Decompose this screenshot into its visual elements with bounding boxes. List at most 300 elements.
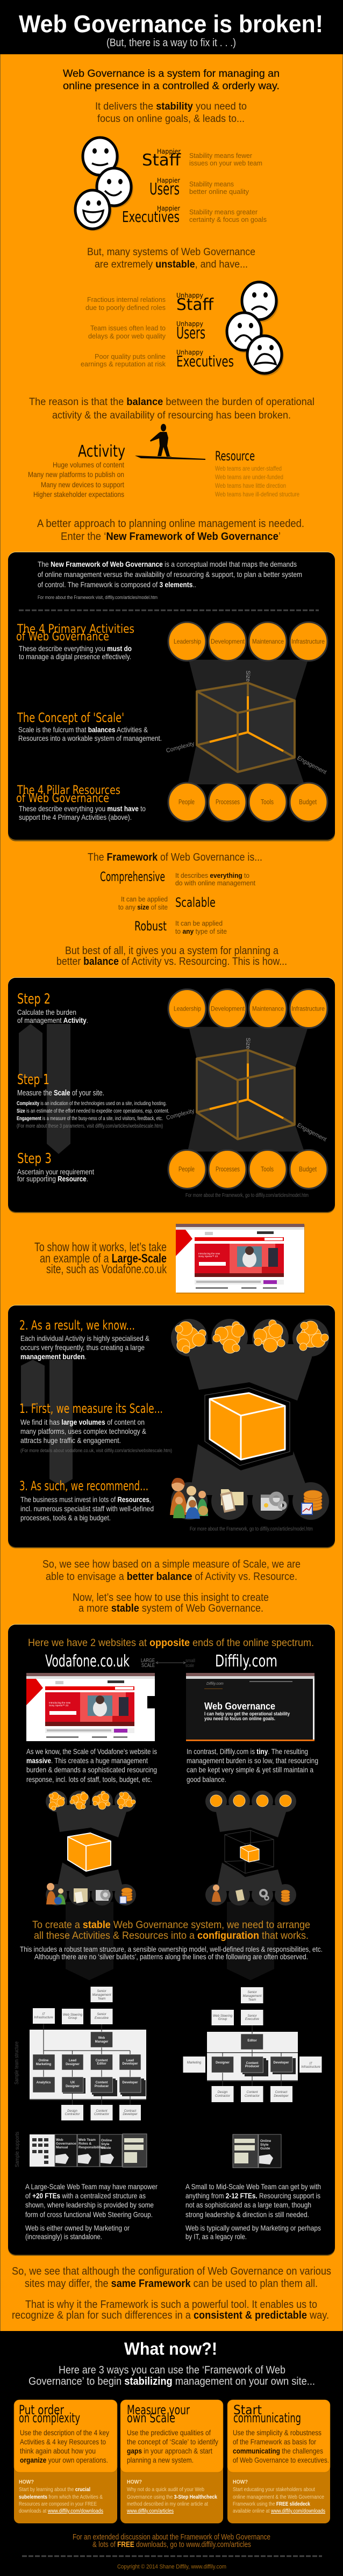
large-scale example text: To show how it works, let’s take (34, 1240, 167, 1254)
step 3: Ascertain your requirement (17, 1167, 94, 1176)
org chart: large team: Developer (122, 2062, 138, 2066)
small team description: A Small to Mid-Scale Web Team can get by with (185, 2182, 321, 2191)
card: measure your own scale: Use the predictive qualities of (127, 2428, 211, 2437)
card: start communicating (227, 2400, 330, 2523)
stability text: It delivers the stability you need to (95, 101, 247, 112)
better approach text: A better approach to planning online management is needed. (37, 518, 304, 530)
card: put order on complexity: HOW? (19, 2479, 34, 2485)
vodafone description: burden & demands a sophisticated resourcing (26, 1765, 157, 1774)
card: measure your own scale: Governance using the 3-Step Healthcheck (127, 2494, 217, 2500)
panel: framework (8, 552, 335, 841)
icon: activity blobs (175, 1320, 328, 1353)
scalable: It can be applied (121, 895, 168, 903)
step 2: Calculate the burden (17, 1008, 76, 1016)
org chart: small team: Contract (275, 2091, 288, 2094)
org chart: large team: Content (96, 2110, 108, 2113)
same framework conclusion: That is why it the Framework is such a powerful tool. It enables us to (25, 2299, 317, 2311)
org chart: large team: Designer (66, 2085, 80, 2088)
step 2: of management Activity. (17, 1016, 88, 1024)
icon: staff figures (170, 1478, 208, 1519)
documents: large team supports: Online (101, 2139, 112, 2142)
what now intro: Here are 3 ways you can use the ‘Framework of Web (59, 2364, 285, 2376)
org chart: large team: Web (98, 2037, 105, 2040)
card: measure your own scale: the concept of ‘Scale’ to identify (127, 2437, 218, 2446)
activity circles: Leadership (174, 638, 201, 645)
unhappy list: reasons: delays & poor web quality (88, 332, 166, 340)
arrow: step flow up (19, 1024, 42, 1078)
scalable: Scalable (175, 895, 216, 910)
resource list: Web teams have little direction (215, 482, 286, 489)
unhappy list: reasons: Fractious internal relations (87, 295, 166, 304)
chart: framework model repeated: People (178, 1165, 195, 1173)
org chart: large team: Lead (126, 2059, 134, 2062)
title (19, 10, 323, 49)
step 1: Step 1 (17, 1072, 49, 1088)
step: as a result: 2. As a result, we know... (19, 1318, 135, 1333)
unhappy list: labels: Unhappy (176, 349, 203, 356)
arrow: flow down (49, 1360, 73, 1486)
label: sample team structure: Sample team structure (14, 2041, 20, 2084)
org chart: large team: IT (42, 2013, 46, 2016)
step 3: Step 3 (17, 1151, 52, 1167)
small team description: strong leadership & direction is still needed. (185, 2210, 309, 2219)
activity list: Many new devices to support (41, 480, 124, 489)
happier executives: Executives (122, 208, 180, 226)
activity circles (168, 622, 327, 661)
documents: small team supports: Guide (260, 2147, 270, 2151)
card: start communicating: Use the simplicity & robustness (233, 2428, 321, 2437)
step 1: (For more about these 3 parameters, visit diffily.com/articles/websitescale.htm) (17, 1123, 163, 1129)
card: start communicating: Framework using the FREE slidedeck (233, 2501, 310, 2507)
unstable text (87, 247, 255, 270)
card: put order on complexity: Use the description of the 4 key (20, 2428, 109, 2437)
icon: processes folder and clipboard (220, 1489, 244, 1513)
resource circles: Budget (299, 798, 317, 806)
heading: 4 pillar resources: support the 4 Primary Activities (above). (19, 813, 132, 821)
screenshot: diffily: I can help you get the operational stability (204, 1711, 290, 1716)
org chart: small team: Contractor (215, 2095, 231, 2098)
framework link note: For more about the Framework, go to diffily.com/articles/model.htm (185, 1193, 309, 1199)
unhappy list: labels: Staff (176, 295, 214, 314)
org chart: small team: Designer (216, 2061, 230, 2065)
org chart: large team: Contractor (65, 2113, 81, 2116)
step: first measure: (For more details about vodafone.co.uk, visit diffily.com/articles/websitescale.htm) (20, 1448, 172, 1454)
card: put order on complexity: Put order (19, 2402, 64, 2418)
arrow: flow up (21, 1360, 45, 1406)
chart: small-scale mini model (205, 1791, 296, 1906)
org chart: small team: IT (309, 2062, 313, 2066)
intro definition text: online presence in a controlled & orderly way. (63, 81, 280, 92)
activity list: Huge volumes of content (53, 460, 124, 469)
activity list: Activity (78, 442, 125, 461)
icon: happy faces (75, 138, 133, 231)
step: recommend: incl. numerous specialist staff with well-defined (20, 1504, 154, 1513)
site names and scale arrow: SCALE (141, 1663, 155, 1669)
large team description: Web is either owned by Marketing or (25, 2224, 130, 2232)
site names and scale arrow: small (185, 1658, 195, 1663)
org chart: small team: Design (218, 2091, 228, 2094)
diffily description: In contrast, Diffily.com is tiny. The resulting (187, 1747, 308, 1756)
org chart: large team: Senior (97, 1990, 107, 1993)
framework qualities heading: The Framework of Web Governance is... (88, 852, 262, 863)
step 1: Engagement is a measure of the busy-ness of a site, incl visitors, feedback, etc. (17, 1115, 163, 1122)
org chart: large team: Manager (95, 2040, 109, 2044)
step 3: for supporting Resource. (17, 1174, 88, 1183)
robust: Robust (134, 919, 167, 934)
org chart: small team: Management (242, 1995, 262, 1998)
large team description: shown, where leadership is provided by some (25, 2200, 154, 2209)
large-scale example text: an example of a Large-Scale (40, 1251, 167, 1265)
icon: budget coins and chart (302, 1490, 322, 1514)
card: measure your own scale: gaps in your approach & start (127, 2447, 212, 2455)
unhappy list: reasons: due to poorly defined roles (85, 304, 166, 312)
comprehensive: do with online management (175, 879, 255, 887)
step: first measure: We find it has large volumes of content on (20, 1418, 145, 1426)
org chart: large team: Contract (124, 2110, 137, 2113)
org chart: large team: Editor (97, 2062, 106, 2066)
step: recommend: The business must invest in lots of Resources, (20, 1495, 151, 1504)
card: measure your own scale: HOW? (127, 2479, 142, 2485)
step: recommend: 3. As such, we recommend... (19, 1478, 148, 1493)
card: start communicating: communicating the challenges (233, 2447, 323, 2455)
same framework conclusion: sites may differ, the same Framework can be used to plan them all. (25, 2278, 318, 2290)
heading: 4 primary activities: These describe everything you must do (19, 644, 132, 653)
stability text: focus on online goals, & leads to... (97, 113, 245, 125)
configuration heading: To create a stable Web Governance system, we need to arrange (32, 1920, 310, 1931)
framework intro text (38, 560, 302, 600)
diffily description: can be kept very simple & yet still maintain a (187, 1765, 313, 1774)
better approach text (37, 518, 304, 543)
configuration explanation (20, 1945, 323, 1961)
small team description: not as sophisticated as a large team, though (185, 2200, 311, 2209)
card: start communicating: online management & the Web Governance (233, 2494, 324, 2500)
resource list: Resource (215, 449, 255, 464)
happier users: Happier (157, 177, 180, 184)
comprehensive: It describes everything to (175, 871, 249, 879)
heading: concept of scale: The Concept of 'Scale' (17, 710, 124, 725)
intro definition text (63, 68, 280, 92)
happier executives (122, 205, 267, 226)
card: put order on complexity: subelements from which the Activities & (19, 2494, 103, 2500)
card: start communicating: HOW? (233, 2479, 248, 2485)
documents: large team supports: Responsibilities (78, 2146, 105, 2149)
happier staff (142, 148, 262, 170)
comprehensive (100, 869, 255, 887)
org chart: large team: Contractor (94, 2113, 110, 2116)
large-scale example text: site, such as Vodafone.co.uk (46, 1262, 167, 1276)
best of all text: better balance of Activity vs. Resourcing. This is how... (56, 956, 287, 968)
card: put order on complexity: downloads at www.diffily.com/downloads (19, 2508, 103, 2514)
arrow: step flow down (47, 1024, 70, 1154)
card: put order on complexity: organize your own operations. (20, 2456, 108, 2464)
vodafone description: As we know, the Scale of Vodafone’s website is (26, 1747, 157, 1756)
activity list: Many new platforms to publish on (28, 470, 124, 479)
documents: large team supports: Governance (56, 2142, 76, 2146)
card: start communicating: of the Framework as basis for (233, 2437, 316, 2446)
happier staff: Happier (157, 148, 181, 155)
org chart: small team: Marketing (187, 2061, 202, 2065)
org chart: large team: Developer (123, 2113, 138, 2116)
org chart: small team: Content (246, 2091, 258, 2094)
happier users: Stability means (189, 180, 234, 188)
card: put order on complexity: Start by learning about the crucial (19, 2486, 90, 2493)
better balance text: a more stable system of Web Governance. (78, 1603, 263, 1614)
unhappy list: labels: Users (176, 324, 205, 343)
diffily description: good balance. (187, 1775, 226, 1784)
org chart: small team: Developer (273, 2061, 289, 2065)
robust: to any type of site (175, 927, 227, 935)
resource circles (168, 783, 327, 821)
org chart: small team: Infrastructure (301, 2066, 320, 2069)
icon: tools gears (261, 1493, 285, 1511)
card: measure your own scale: method described in my online article at (127, 2501, 208, 2507)
documents: small team supports: Online (260, 2139, 271, 2143)
label: sample supports: Sample supports (15, 2132, 20, 2167)
card: start communicating: Start educating your stakeholders about (233, 2486, 315, 2493)
org chart: large team (30, 1987, 146, 2120)
org chart: small team: Content (246, 2062, 258, 2065)
what now heading: What now?! (124, 2339, 217, 2358)
configuration explanation: Although there are no ‘silver bullets’, patterns along the lines of the following are often observed. (34, 1953, 308, 1961)
chart: framework model repeated: Budget (299, 1165, 317, 1173)
org chart: large team: Team (98, 1997, 105, 2001)
robust: It can be applied (175, 919, 223, 927)
same framework conclusion (12, 2265, 331, 2321)
icon: large solid cube (198, 1382, 297, 1470)
extended discussion note: & lots of FREE downloads, go to www.diffily.com/articles (92, 2541, 251, 2549)
arrow: shadow down left (66, 1902, 113, 1980)
documents: large team supports: Roles & (78, 2142, 92, 2146)
screenshot: vodafone: Introducing the new (49, 1701, 71, 1704)
card: measure your own scale: Why not do a quick audit of your Web (127, 2486, 204, 2493)
activity circles: Maintenance (252, 638, 284, 645)
org chart: large team: Lead (69, 2059, 76, 2062)
org chart: large team: Producer (95, 2085, 109, 2088)
activity list: Higher stakeholder expectations (33, 490, 124, 499)
site names and scale arrow: LARGE (141, 1658, 155, 1664)
step 2 (17, 991, 88, 1024)
org chart: large team: Management (92, 1994, 111, 1997)
extended discussion note (73, 2533, 270, 2549)
screenshot: diffily (186, 1673, 315, 1741)
configuration heading (32, 1920, 310, 1942)
arrow: shadow down right (227, 1902, 274, 1980)
step: as a result: Each individual Activity is highly specialised & (20, 1334, 150, 1343)
balance text: The reason is that the balance between the burden of operational (29, 396, 315, 408)
card: put order on complexity: on complexity (19, 2411, 80, 2426)
heading: concept of scale: Resources into a workable system of management. (18, 734, 162, 742)
card: measure your own scale: own Scale (127, 2411, 175, 2426)
card: measure your own scale: Measure your (127, 2402, 190, 2418)
site names and scale arrow: Diffily.com (215, 1652, 277, 1671)
chart: framework model repeated: Engagement (296, 1122, 327, 1143)
better balance text (42, 1558, 301, 1614)
robust (134, 919, 227, 935)
heading: 4 primary activities: The 4 Primary Activities (17, 623, 134, 636)
vodafone description (26, 1747, 157, 1784)
screenshot: vodafone: Sony Xperia™ Z2 (49, 1704, 69, 1707)
org chart: small team: Editor (247, 2039, 257, 2043)
card: put order on complexity (14, 2400, 117, 2523)
resource list: Web teams are under-staffed (215, 465, 282, 472)
documents: large team supports: Manual (56, 2146, 68, 2149)
documents: large team supports (30, 2134, 147, 2167)
happier users: Users (149, 180, 180, 199)
heading: 4 pillar resources: These describe everything you must have to (19, 804, 146, 813)
heading: 4 primary activities: to manage a digital presence effectively. (19, 652, 131, 661)
org chart: small team: Web Steering (213, 2015, 233, 2018)
card: start communicating: available online at www.diffily.com/downloads (233, 2508, 325, 2514)
unstable text: But, many systems of Web Governance (87, 247, 255, 258)
happier staff: Staff (142, 151, 181, 170)
screenshot: vodafone (26, 1673, 155, 1741)
balance text: activity & the availability of resourcing has been broken. (52, 409, 291, 421)
org chart: large team: Content (96, 2059, 108, 2062)
screenshot: vodafone (176, 1224, 305, 1294)
heading: concept of scale: Scale is the fulcrum that balances Activities & (18, 725, 148, 734)
card: measure your own scale: www.diffily.com/articles (126, 2508, 174, 2514)
better balance text: Now, let’s see how to use this insight to create (73, 1592, 269, 1604)
happier executives: certainty & focus on goals (189, 215, 267, 223)
scale cube: Complexity (166, 740, 195, 754)
resource circles: People (178, 798, 195, 806)
chart: framework model (166, 622, 327, 821)
step 2: Step 2 (17, 991, 51, 1007)
org chart: large team: Marketing (36, 2063, 52, 2066)
large team description: form of cross functional Web Steering Group. (25, 2210, 153, 2219)
chart: framework model repeated (166, 990, 327, 1188)
unhappy list: labels: Unhappy (176, 292, 203, 299)
large team description: A Large-Scale Web Team may have manpower (25, 2182, 158, 2191)
step: as a result: occurs very frequently, thus creating a large (20, 1343, 145, 1352)
happier executives: Happier (157, 205, 180, 212)
chart: large-scale model (170, 1319, 329, 1520)
chart: framework model repeated: Leadership (174, 1005, 201, 1012)
what now intro (28, 2364, 315, 2387)
step: as a result (19, 1318, 150, 1361)
small team description: Web is typically owned by Marketing or perhaps (185, 2224, 321, 2232)
org chart: small team: Team (248, 1998, 256, 2002)
step 3 (17, 1151, 94, 1183)
step 1: Complexity is an indication of the technologies used on a site, including hosting. (17, 1100, 167, 1107)
site names and scale arrow: Vodafone.co.uk (45, 1652, 130, 1671)
large team description: (increasingly) is standalone. (25, 2232, 102, 2241)
balance text (29, 396, 315, 421)
org chart: large team: Analytics (37, 2081, 51, 2084)
org chart: large team: Senior (97, 2013, 107, 2016)
scalable: to any size of site (118, 903, 168, 911)
unhappy list: labels: Unhappy (176, 320, 203, 328)
panel heading: Here we have 2 websites at opposite ends of the online spectrum. (28, 1637, 314, 1649)
documents: large team supports: Web (56, 2138, 63, 2142)
better balance text: So, we see how based on a simple measure of Scale, we are (42, 1558, 301, 1570)
heading: 4 pillar resources: of Web Governance (16, 792, 109, 805)
diffily description (187, 1747, 318, 1784)
screenshot: diffily: Web Governance (204, 1701, 275, 1712)
intro definition text: Web Governance is a system for managing an (63, 68, 280, 80)
resource list: Web teams are under-funded (215, 473, 283, 481)
org chart: large team: Web Steering (63, 2014, 83, 2017)
org chart: large team: Online (39, 2059, 49, 2062)
card: put order on complexity: think again about how you (20, 2447, 96, 2455)
org chart: large team: Design (67, 2110, 77, 2113)
stability text (95, 101, 247, 125)
better balance text: able to envisage a better balance of Activity vs. Resource. (46, 1571, 297, 1583)
title: Web Governance is broken! (19, 10, 323, 38)
org chart: large team: Content (96, 2081, 108, 2084)
happier staff: Stability means fewer (189, 151, 253, 160)
org chart: small team: Senior (247, 1991, 258, 1994)
chart: framework model repeated: Infrastructure (291, 1005, 325, 1012)
site names and scale arrow (45, 1652, 277, 1671)
configuration heading: all these Activities & Resources into a configuration that works. (34, 1930, 309, 1942)
small team description (185, 2182, 321, 2241)
panel: two websites compared (8, 1624, 335, 2256)
org chart: large team: Group (68, 2017, 77, 2020)
large-scale example text (34, 1240, 167, 1276)
documents: large team supports: Style (101, 2142, 110, 2146)
org chart: small team: Group (218, 2018, 227, 2021)
unhappy list: labels: Executives (176, 352, 234, 370)
best of all text (56, 945, 287, 968)
org chart: small team: Executive (245, 2018, 260, 2021)
panel: steps (8, 977, 335, 1213)
unhappy list: reasons: Poor quality puts online (95, 352, 166, 360)
chart: framework model repeated: Maintenance (252, 1005, 284, 1012)
framework intro text: of online management versus the availability of resourcing & support, to plan a better system (38, 570, 302, 579)
scale cube (166, 670, 327, 776)
scale cube: Size (245, 670, 251, 682)
framework intro text: The New Framework of Web Governance is a conceptual model that maps the demands (38, 560, 297, 568)
small team description: by IT, as a legacy role. (185, 2232, 247, 2241)
step: first measure: attracts huge traffic & engagement. (20, 1436, 121, 1445)
vodafone description: response, incl. lots of staff, tools, budget, etc. (26, 1775, 152, 1784)
happier users: better online quality (189, 187, 249, 196)
org chart: large team: Designer (66, 2063, 80, 2066)
unhappy list: reasons: Team issues often lead to (90, 324, 166, 332)
framework intro text: of control. The Framework is composed of 3 elements.. (38, 580, 196, 589)
chart: framework model repeated: Complexity (166, 1108, 195, 1121)
copyright: Copyright © 2014 Shane Diffily, www.diffily.com (117, 2564, 226, 2570)
same framework conclusion: recognize & plan for such differences in a consistent & predictable way. (12, 2310, 329, 2321)
org chart: large team: Developer (122, 2081, 138, 2084)
step: as a result: management burden. (20, 1352, 87, 1361)
diffily description: management burden is so low, that resourcing (187, 1756, 318, 1765)
large team description: of +20 FTEs with a centralized structure as (25, 2191, 146, 2200)
org chart: large team: UX (70, 2081, 75, 2084)
resource list: Web teams have ill-defined structure (215, 490, 299, 498)
card: start communicating: Start (233, 2402, 262, 2418)
better approach text: Enter the ‘New Framework of Web Governance’ (61, 531, 281, 543)
icon: sad faces (227, 282, 284, 376)
card: measure your own scale (120, 2400, 223, 2523)
resource circles: Tools (261, 798, 274, 806)
org chart: small team (183, 1987, 321, 2102)
resource circles: Processes (216, 798, 240, 806)
site names and scale arrow: scale (185, 1663, 194, 1668)
happier staff: issues on your web team (189, 159, 262, 167)
extended discussion note: For an extended discussion about the Framework of Web Governance (73, 2533, 270, 2542)
org chart: small team: Producer (245, 2065, 260, 2068)
step: first measure (19, 1401, 172, 1454)
framework intro text: For more about the Framework visit, diffily.com/articles/model.htm (38, 595, 158, 600)
step: first measure: many platforms, uses complex technology & (20, 1427, 147, 1435)
org chart: small team: Contractor (245, 2095, 260, 2098)
step: recommend (19, 1478, 154, 1522)
large team description (25, 2182, 158, 2241)
title: (But, there is a way to fix it . . .) (106, 37, 236, 49)
unhappy list: labels (176, 292, 234, 370)
